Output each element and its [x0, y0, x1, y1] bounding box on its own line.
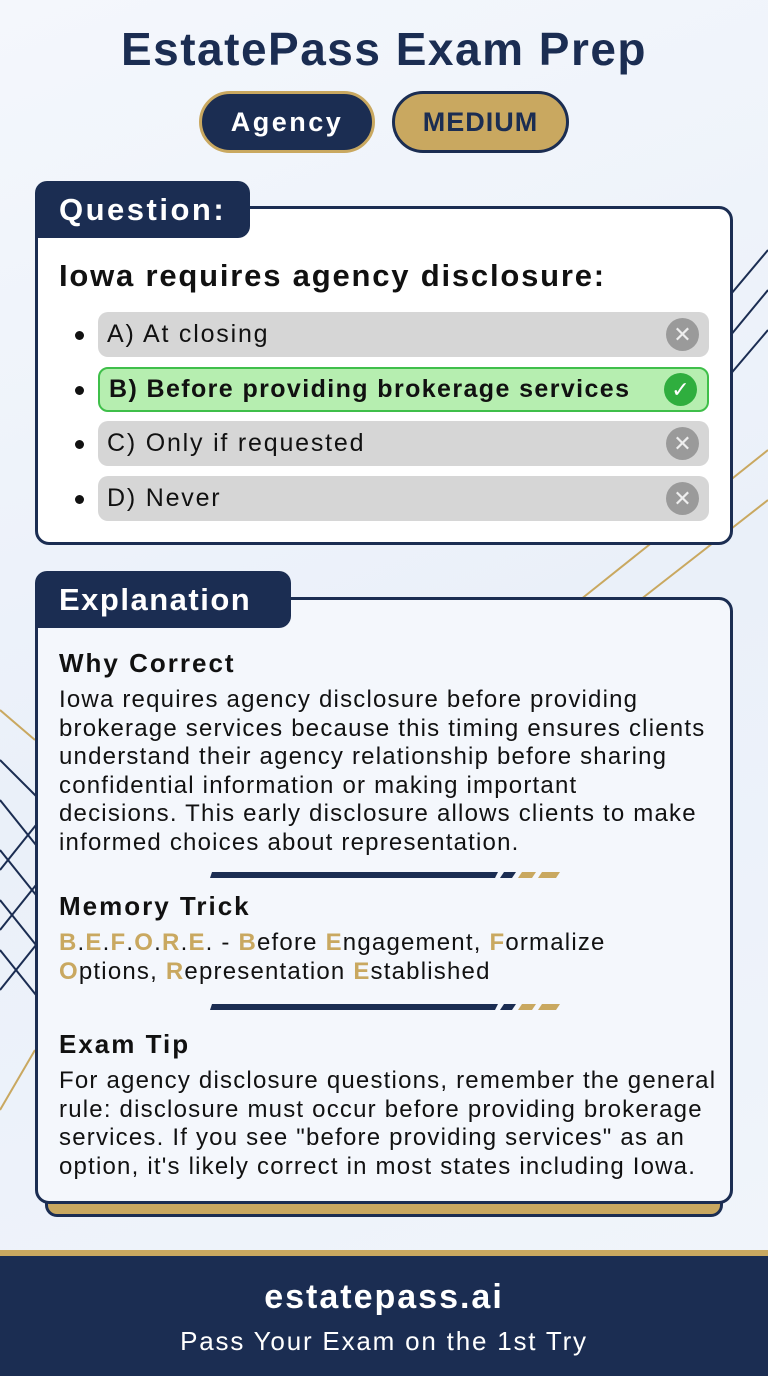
text: exam tip: For agency disclosure questions, remember the general	[59, 1067, 716, 1094]
option C: ✕	[673, 430, 692, 456]
divider	[210, 1004, 560, 1010]
text: why correct: confidential information or making important	[59, 772, 577, 798]
bullets	[75, 331, 84, 504]
pill: Agency	[199, 91, 375, 153]
text: memory trick: B.E.F.O.R.E. - Before Engagement, Formalize	[59, 929, 606, 956]
text: exam tip: option, it's likely correct in most states including Iowa.	[59, 1152, 696, 1180]
text: why correct: decisions. This early disclosure allows clients to make	[59, 800, 697, 827]
option C: C) Only if requested	[107, 429, 365, 457]
title: EstatePass Exam Prep	[121, 23, 647, 75]
text: memory trick	[59, 929, 606, 984]
gold underlay	[45, 1190, 723, 1217]
footer url: estatepass.ai	[264, 1278, 504, 1316]
text: why correct: brokerage services because this timing ensures clients	[59, 714, 705, 742]
tab: Explanation	[35, 571, 291, 628]
heading: Why Correct: Why Correct	[59, 648, 236, 678]
pill: MEDIUM	[392, 91, 569, 153]
divider	[210, 872, 560, 878]
option B correct: B) Before providing brokerage services	[109, 375, 630, 403]
question text: Iowa requires agency disclosure:	[59, 258, 606, 293]
pill: MEDIUM: MEDIUM	[423, 106, 538, 136]
option D: D) Never	[107, 484, 221, 512]
pill: Agency: Agency	[231, 106, 343, 136]
text: exam tip: rule: disclosure must occur before providing brokerage	[59, 1096, 703, 1122]
text: memory trick: Options, Representation Established	[59, 958, 491, 984]
text: exam tip: services. If you see "before providing services" as an	[59, 1124, 685, 1151]
option B correct	[98, 367, 709, 412]
option D: ✕	[673, 486, 692, 510]
tab: Explanation: Explanation	[59, 582, 251, 616]
panel: explanation	[35, 597, 733, 1204]
footer	[0, 1250, 768, 1376]
option C	[98, 421, 709, 466]
text: why correct: understand their agency relationship before sharing	[59, 743, 667, 770]
option A	[98, 312, 709, 357]
text: why correct	[59, 686, 705, 856]
heading: Memory Trick: Memory Trick	[59, 891, 251, 921]
text: why correct: Iowa requires agency disclosure before providing	[59, 686, 638, 713]
option A: ✕	[673, 322, 692, 346]
option B correct: ✓	[671, 376, 690, 402]
tab: Question	[35, 181, 250, 238]
option A: A) At closing	[107, 320, 269, 348]
text: why correct: informed choices about representation.	[59, 828, 520, 856]
option D	[98, 476, 709, 521]
text: exam tip	[59, 1067, 716, 1180]
panel: question	[35, 206, 733, 545]
heading: Exam Tip: Exam Tip	[59, 1029, 190, 1059]
footer tagline: Pass Your Exam on the 1st Try	[180, 1326, 588, 1356]
tab: Question: Question:	[59, 192, 226, 226]
